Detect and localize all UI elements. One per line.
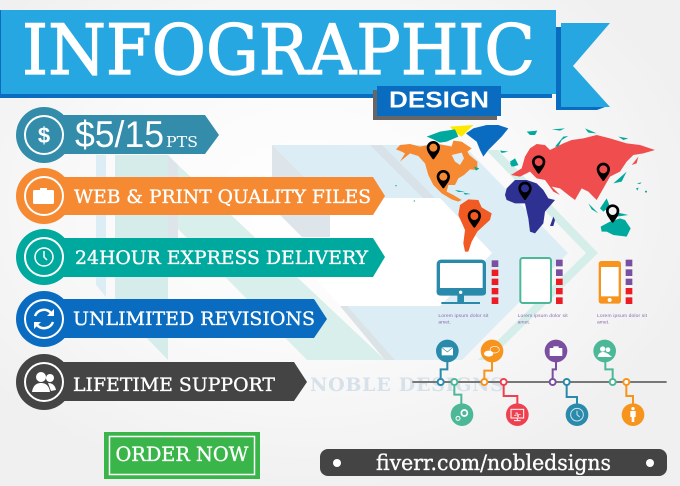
eurasia [511,135,655,200]
south america [458,199,492,252]
australia [601,218,631,237]
lorem captions [438,313,648,325]
timeline icon: mail [436,340,459,362]
madagascar [550,217,555,226]
ribbon tail [556,23,610,110]
arctic and caribbean islands [395,129,518,202]
feature: web and print quality files [16,168,385,224]
order now button: ORDER NOW [116,442,249,466]
north america [396,141,477,202]
device: phone [599,260,632,304]
timeline icon: screen chart [506,403,529,426]
icon: clock [35,248,53,266]
africa [505,180,555,233]
icon: people [32,372,56,392]
timeline icon: people [593,340,616,362]
subtitle: design [373,86,501,120]
icon: briefcase [33,188,54,204]
device: tablet [520,258,563,304]
feature: lifetime support [16,354,307,410]
yellow arctic island [450,125,473,137]
title banner: INFOGRAPHIC [22,11,535,91]
icon: refresh arrows [34,309,54,329]
price tag [16,107,219,163]
lorem captions: Lorem ipsum dolor sit [597,313,648,319]
japan [632,157,638,165]
timeline icon: person [622,403,644,426]
lorem captions: amet. [597,319,609,325]
greenland [466,125,508,157]
feature label: UNLIMITED REVISIONS [73,308,315,330]
subtitle: design: DESIGN [389,86,489,112]
price text: $5/15 [75,114,164,155]
feature label: LIFETIME SUPPORT [73,374,275,396]
watermark text: NOBLE DESIGNS [310,374,504,396]
asian and arctic islands [500,128,647,217]
map pins: eurasia, africa and oceania [519,156,618,222]
feature label: 24HOUR EXPRESS DELIVERY [75,247,368,269]
feature label: WEB & PRINT QUALITY FILES [74,186,371,208]
timeline icon: chat [481,340,503,362]
lorem captions: amet. [518,319,530,325]
map pins: americas [428,142,480,227]
lorem captions: amet. [438,319,451,325]
footer url bar: fiverr.com/nobledsigns [376,451,611,475]
devices and timeline [412,258,667,426]
feature: unlimited revisions [16,291,327,347]
world map: eurasia, africa and australia [500,128,655,237]
feature: 24 hour express delivery [16,229,385,285]
world map: americas and greenland [395,125,518,252]
icon: dollar: $ [38,123,50,148]
timeline connectors and nodes [438,360,633,409]
timeline icon: gears [451,403,473,426]
lorem captions: Lorem ipsum dolor sit [438,313,489,319]
points label: PTS [166,133,198,151]
footer url bar [320,449,667,476]
timeline axis [412,381,667,383]
order now button [104,432,260,479]
timeline icon: briefcase [545,340,567,362]
lorem captions: Lorem ipsum dolor sit [518,313,568,319]
device: monitor [437,260,498,304]
timeline icon: clock [566,403,588,426]
